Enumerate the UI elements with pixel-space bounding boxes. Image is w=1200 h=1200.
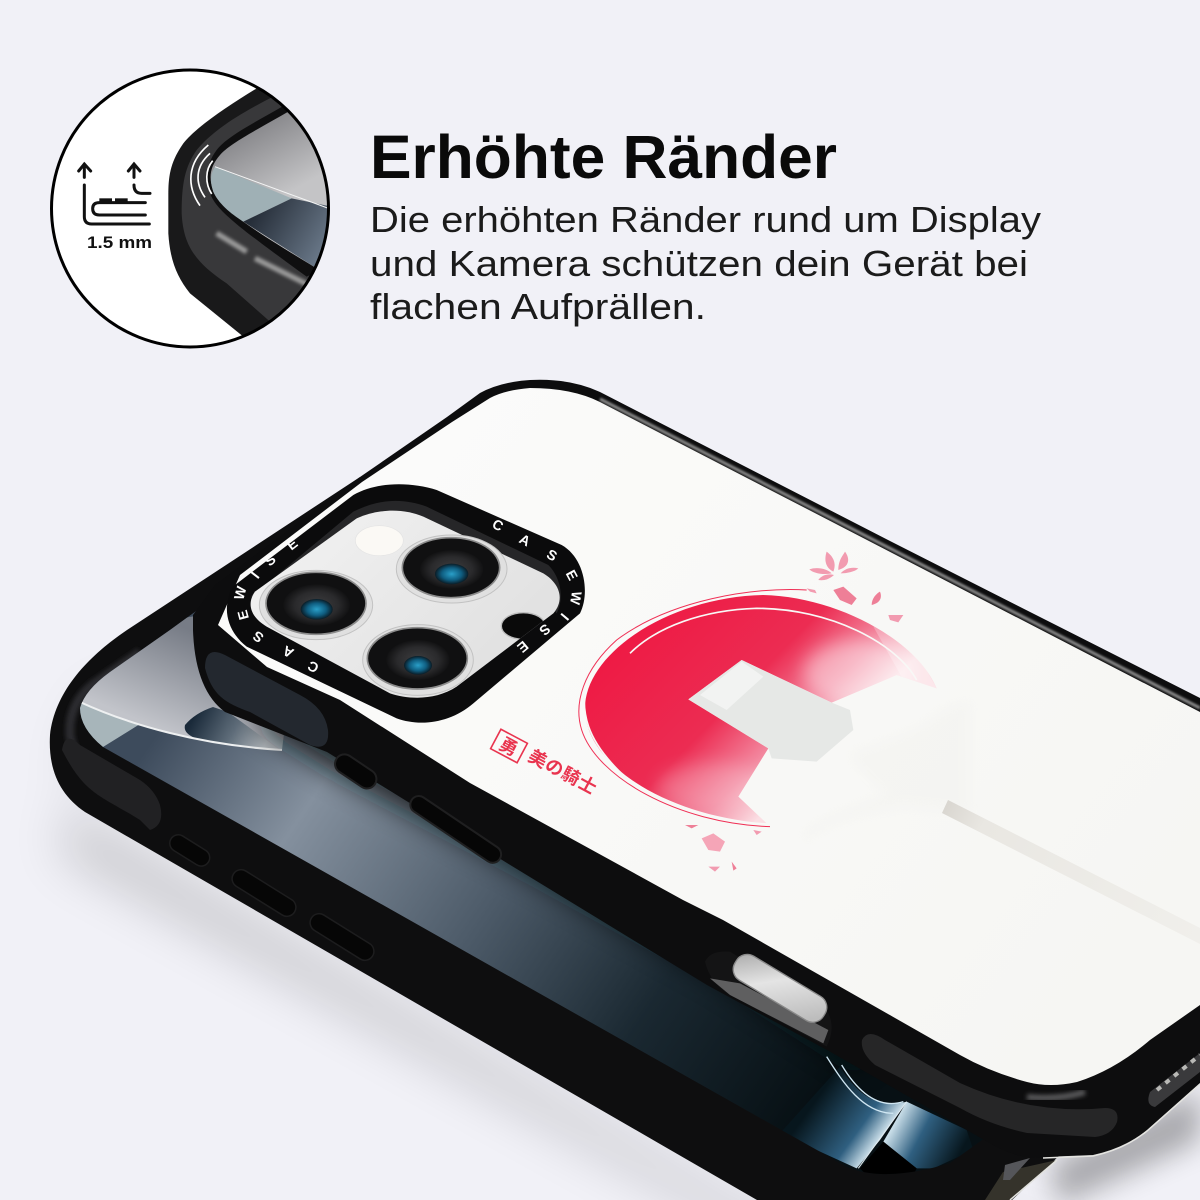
CASEWISE lettering on camera ring: I [247,569,263,581]
upper phone side controls [331,751,504,866]
samurai body silhouette [803,702,970,840]
CASEWISE lettering on camera ring: S [536,621,554,639]
CASEWISE lettering on camera ring [231,516,585,676]
CASEWISE lettering on camera ring: W [231,584,250,601]
drop shadow under lower phone [60,680,1100,1200]
CASEWISE lettering on camera ring: S [250,628,266,646]
detail circle: raised edge close-up [51,70,340,348]
artwork: samurai and red sun [579,552,970,872]
flash [355,526,403,556]
lower phone right edge [985,1158,1057,1200]
silver button [705,950,832,1047]
lower phone (screen side) [50,477,1060,1200]
screen reflection [780,1057,973,1175]
camera ring [227,484,585,723]
body text: und Kamera schützen dein Gerät bei [370,243,1028,284]
CASEWISE lettering on camera ring: C [490,516,506,534]
icon: raised edge diagram [79,164,150,224]
back face edge shade [600,399,1200,708]
lower corner grip [62,739,161,830]
lower case bumper [50,477,1060,1200]
CASEWISE lettering on camera ring: A [517,531,533,549]
CASEWISE lettering on camera ring: I [558,610,572,624]
phone corner close-up [168,88,327,336]
lens 2 [396,535,507,603]
CASEWISE lettering on camera ring: E [563,567,581,583]
CASEWISE lettering on camera ring: W [567,590,585,607]
body text: Die erhöhten Ränder rund um Display [370,199,1041,240]
lens 3 [363,625,473,695]
sword blade [942,800,1200,944]
silver rim [1043,1084,1200,1158]
camera module [227,484,585,723]
camera glass [251,511,560,698]
lens 1 [259,570,373,640]
upper right grip [862,1034,1118,1137]
microphone hole [501,613,545,639]
CASEWISE lettering on camera ring: E [234,608,252,622]
signature seal and caption [491,729,600,798]
signature seal and caption: 勇 [496,734,521,760]
label: 1.5 mm: 1.5 mm [87,233,152,252]
samurai helmet silhouette [688,660,853,762]
speaker strip [1148,1053,1200,1107]
CASEWISE lettering on camera ring: E [514,638,532,656]
screen [80,611,972,1174]
upper case bumper [193,380,1200,1158]
heading: Erhöhte Ränder [370,123,837,191]
CASEWISE lettering on camera ring: A [280,643,296,661]
CASEWISE lettering on camera ring: E [283,535,301,553]
signature seal and caption: 美の騎士 [525,745,600,798]
back face [218,388,1200,1085]
drop shadow right of phone [1050,1090,1200,1200]
body text [370,199,1041,327]
lower phone side buttons [167,832,377,964]
upper corner grip [205,652,328,747]
red sun [585,595,937,823]
CASEWISE lettering on camera ring: S [544,546,560,564]
CASEWISE lettering on camera ring: C [305,658,321,676]
CASEWISE lettering on camera ring: S [261,551,279,569]
upper phone (back side) [193,380,1200,1158]
pink blossoms [685,552,903,872]
body text: flachen Aufprällen. [370,286,706,327]
